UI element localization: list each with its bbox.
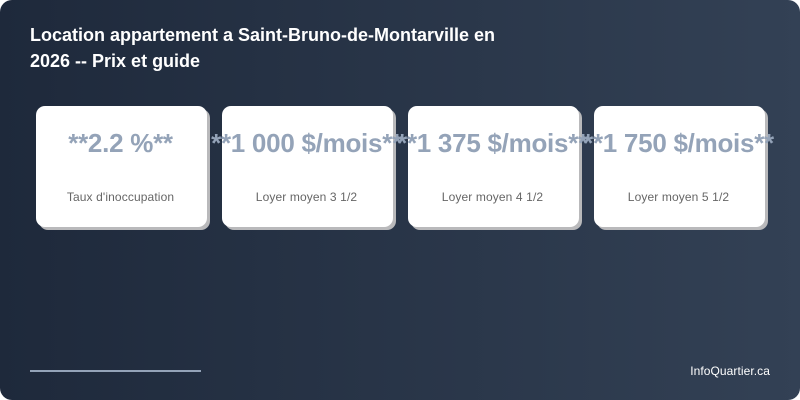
panel: rent 3 1/2 [222, 106, 393, 227]
value: rent 4 1/2: **1 375 $/mois** [397, 128, 588, 158]
panel: rent 5 1/2 [594, 106, 765, 227]
label: rent 5 1/2: Loyer moyen 5 1/2 [628, 190, 729, 204]
panel: rent 4 1/2 [408, 106, 579, 227]
value: rent 5 1/2: **1 750 $/mois** [583, 128, 774, 158]
title: 2026 -- Prix et guide [30, 51, 200, 71]
footer brand: InfoQuartier.ca [690, 364, 770, 378]
panel: vacancy rate [36, 106, 207, 227]
title [30, 25, 495, 71]
label: vacancy rate: Taux d'inoccupation [67, 190, 174, 204]
value: vacancy rate: **2.2 %** [68, 128, 173, 158]
footer accent rule [30, 370, 201, 372]
label: rent 3 1/2: Loyer moyen 3 1/2 [256, 190, 357, 204]
title: Location appartement a Saint-Bruno-de-Montarville en [30, 25, 495, 45]
value: rent 3 1/2: **1 000 $/mois** [211, 128, 402, 158]
label: rent 4 1/2: Loyer moyen 4 1/2 [442, 190, 543, 204]
